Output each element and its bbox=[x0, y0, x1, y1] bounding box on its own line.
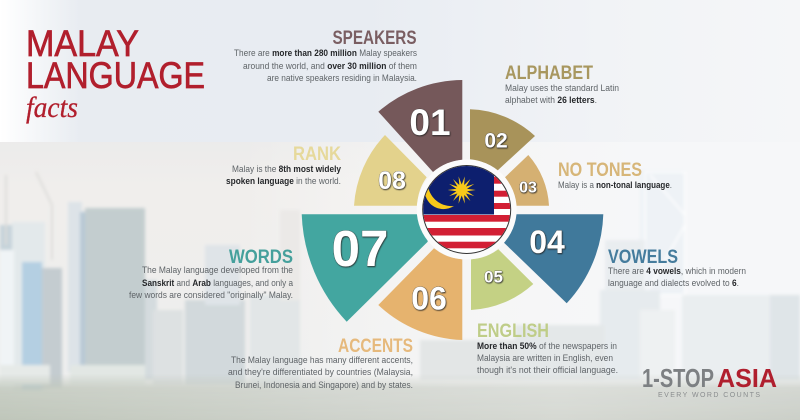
logo: 1-Stop Asia bbox=[642, 363, 777, 399]
text block: english: More than 50% of the newspapers in bbox=[477, 341, 617, 352]
text block: rank: spoken language in the world. bbox=[226, 176, 341, 187]
text block: speakers bbox=[234, 28, 417, 84]
segment 08: rank: 08 bbox=[378, 167, 406, 195]
text block: words: Sanskrit and Arab languages, and only a bbox=[142, 278, 294, 289]
text block: english: Malaysia are written in English, even bbox=[477, 353, 613, 364]
text block: speakers: around the world, and over 30 million of them bbox=[243, 61, 417, 72]
text block: alphabet: ALPHABET bbox=[505, 63, 593, 84]
text block: speakers: SPEAKERS bbox=[332, 28, 416, 49]
text block: words: The Malay language developed from the bbox=[142, 265, 293, 276]
segment 05: english bbox=[471, 249, 533, 310]
text block: english: ENGLISH bbox=[477, 321, 549, 342]
text block: rank bbox=[226, 144, 342, 187]
logo: 1-Stop Asia: ASIA bbox=[717, 363, 777, 393]
text block: accents: ACCENTS bbox=[338, 336, 413, 357]
logo: 1-Stop Asia: 1-STOP bbox=[642, 363, 714, 393]
segment 06: accents: 06 bbox=[411, 280, 447, 316]
text block: speakers: There are more than 280 million Malay speakers bbox=[234, 48, 417, 59]
segment 05: english: 05 bbox=[484, 268, 503, 286]
segment 07: words: 07 bbox=[332, 220, 388, 277]
segment 01: speakers: 01 bbox=[409, 102, 451, 143]
segment 04: vowels bbox=[504, 214, 603, 303]
text block: alphabet bbox=[505, 63, 619, 106]
segment 08: rank bbox=[354, 135, 427, 206]
text block: accents: Brunei, Indonesia and Singapore) and by states. bbox=[235, 380, 413, 391]
text block: alphabet: alphabet with 26 letters. bbox=[505, 95, 597, 106]
segment 04: vowels: 04 bbox=[529, 224, 565, 260]
text block: words bbox=[129, 247, 294, 301]
segment 03: no tones: 03 bbox=[519, 180, 537, 196]
text block: words: WORDS bbox=[229, 247, 293, 268]
text block: speakers: are native speakers residing in Malaysia. bbox=[267, 73, 417, 84]
title: LANGUAGE bbox=[26, 55, 205, 96]
segment 06: accents bbox=[378, 248, 462, 340]
icon: Malaysian flag circle bbox=[417, 160, 517, 260]
segment 01: speakers bbox=[378, 80, 462, 172]
text block: no tones: NO TONES bbox=[558, 160, 642, 181]
text block: words: few words are considered "originally" Malay. bbox=[129, 290, 293, 301]
text block: english bbox=[477, 321, 618, 376]
segment 07: words bbox=[302, 214, 428, 322]
text block: accents bbox=[228, 336, 413, 391]
text block: vowels: VOWELS bbox=[608, 247, 678, 268]
text block: vowels bbox=[608, 247, 746, 289]
title: MALAY bbox=[26, 23, 139, 64]
title: facts bbox=[26, 91, 78, 124]
text block: no tones bbox=[558, 160, 672, 191]
segment 02: alphabet: 02 bbox=[484, 130, 508, 152]
text block: alphabet: Malay uses the standard Latin bbox=[505, 83, 619, 94]
text block: vowels: language and dialects evolved to 6. bbox=[608, 278, 739, 289]
text block: accents: The Malay language has many different accents, bbox=[231, 355, 413, 366]
text block: english: though it's not their official language. bbox=[477, 365, 618, 376]
text block: rank: RANK bbox=[293, 144, 341, 165]
text block: rank: Malay is the 8th most widely bbox=[232, 164, 342, 175]
text block: accents: and they're differentiated by countries (Malaysia, bbox=[228, 367, 413, 378]
text block: vowels: There are 4 vowels, which in modern bbox=[608, 266, 746, 277]
segment 03: no tones bbox=[505, 155, 549, 206]
logo: 1-Stop Asia: EVERY WORD COUNTS bbox=[658, 392, 760, 399]
title bbox=[26, 23, 205, 124]
segment 02: alphabet bbox=[470, 109, 535, 171]
text block: no tones: Malay is a non-tonal language. bbox=[558, 180, 672, 191]
